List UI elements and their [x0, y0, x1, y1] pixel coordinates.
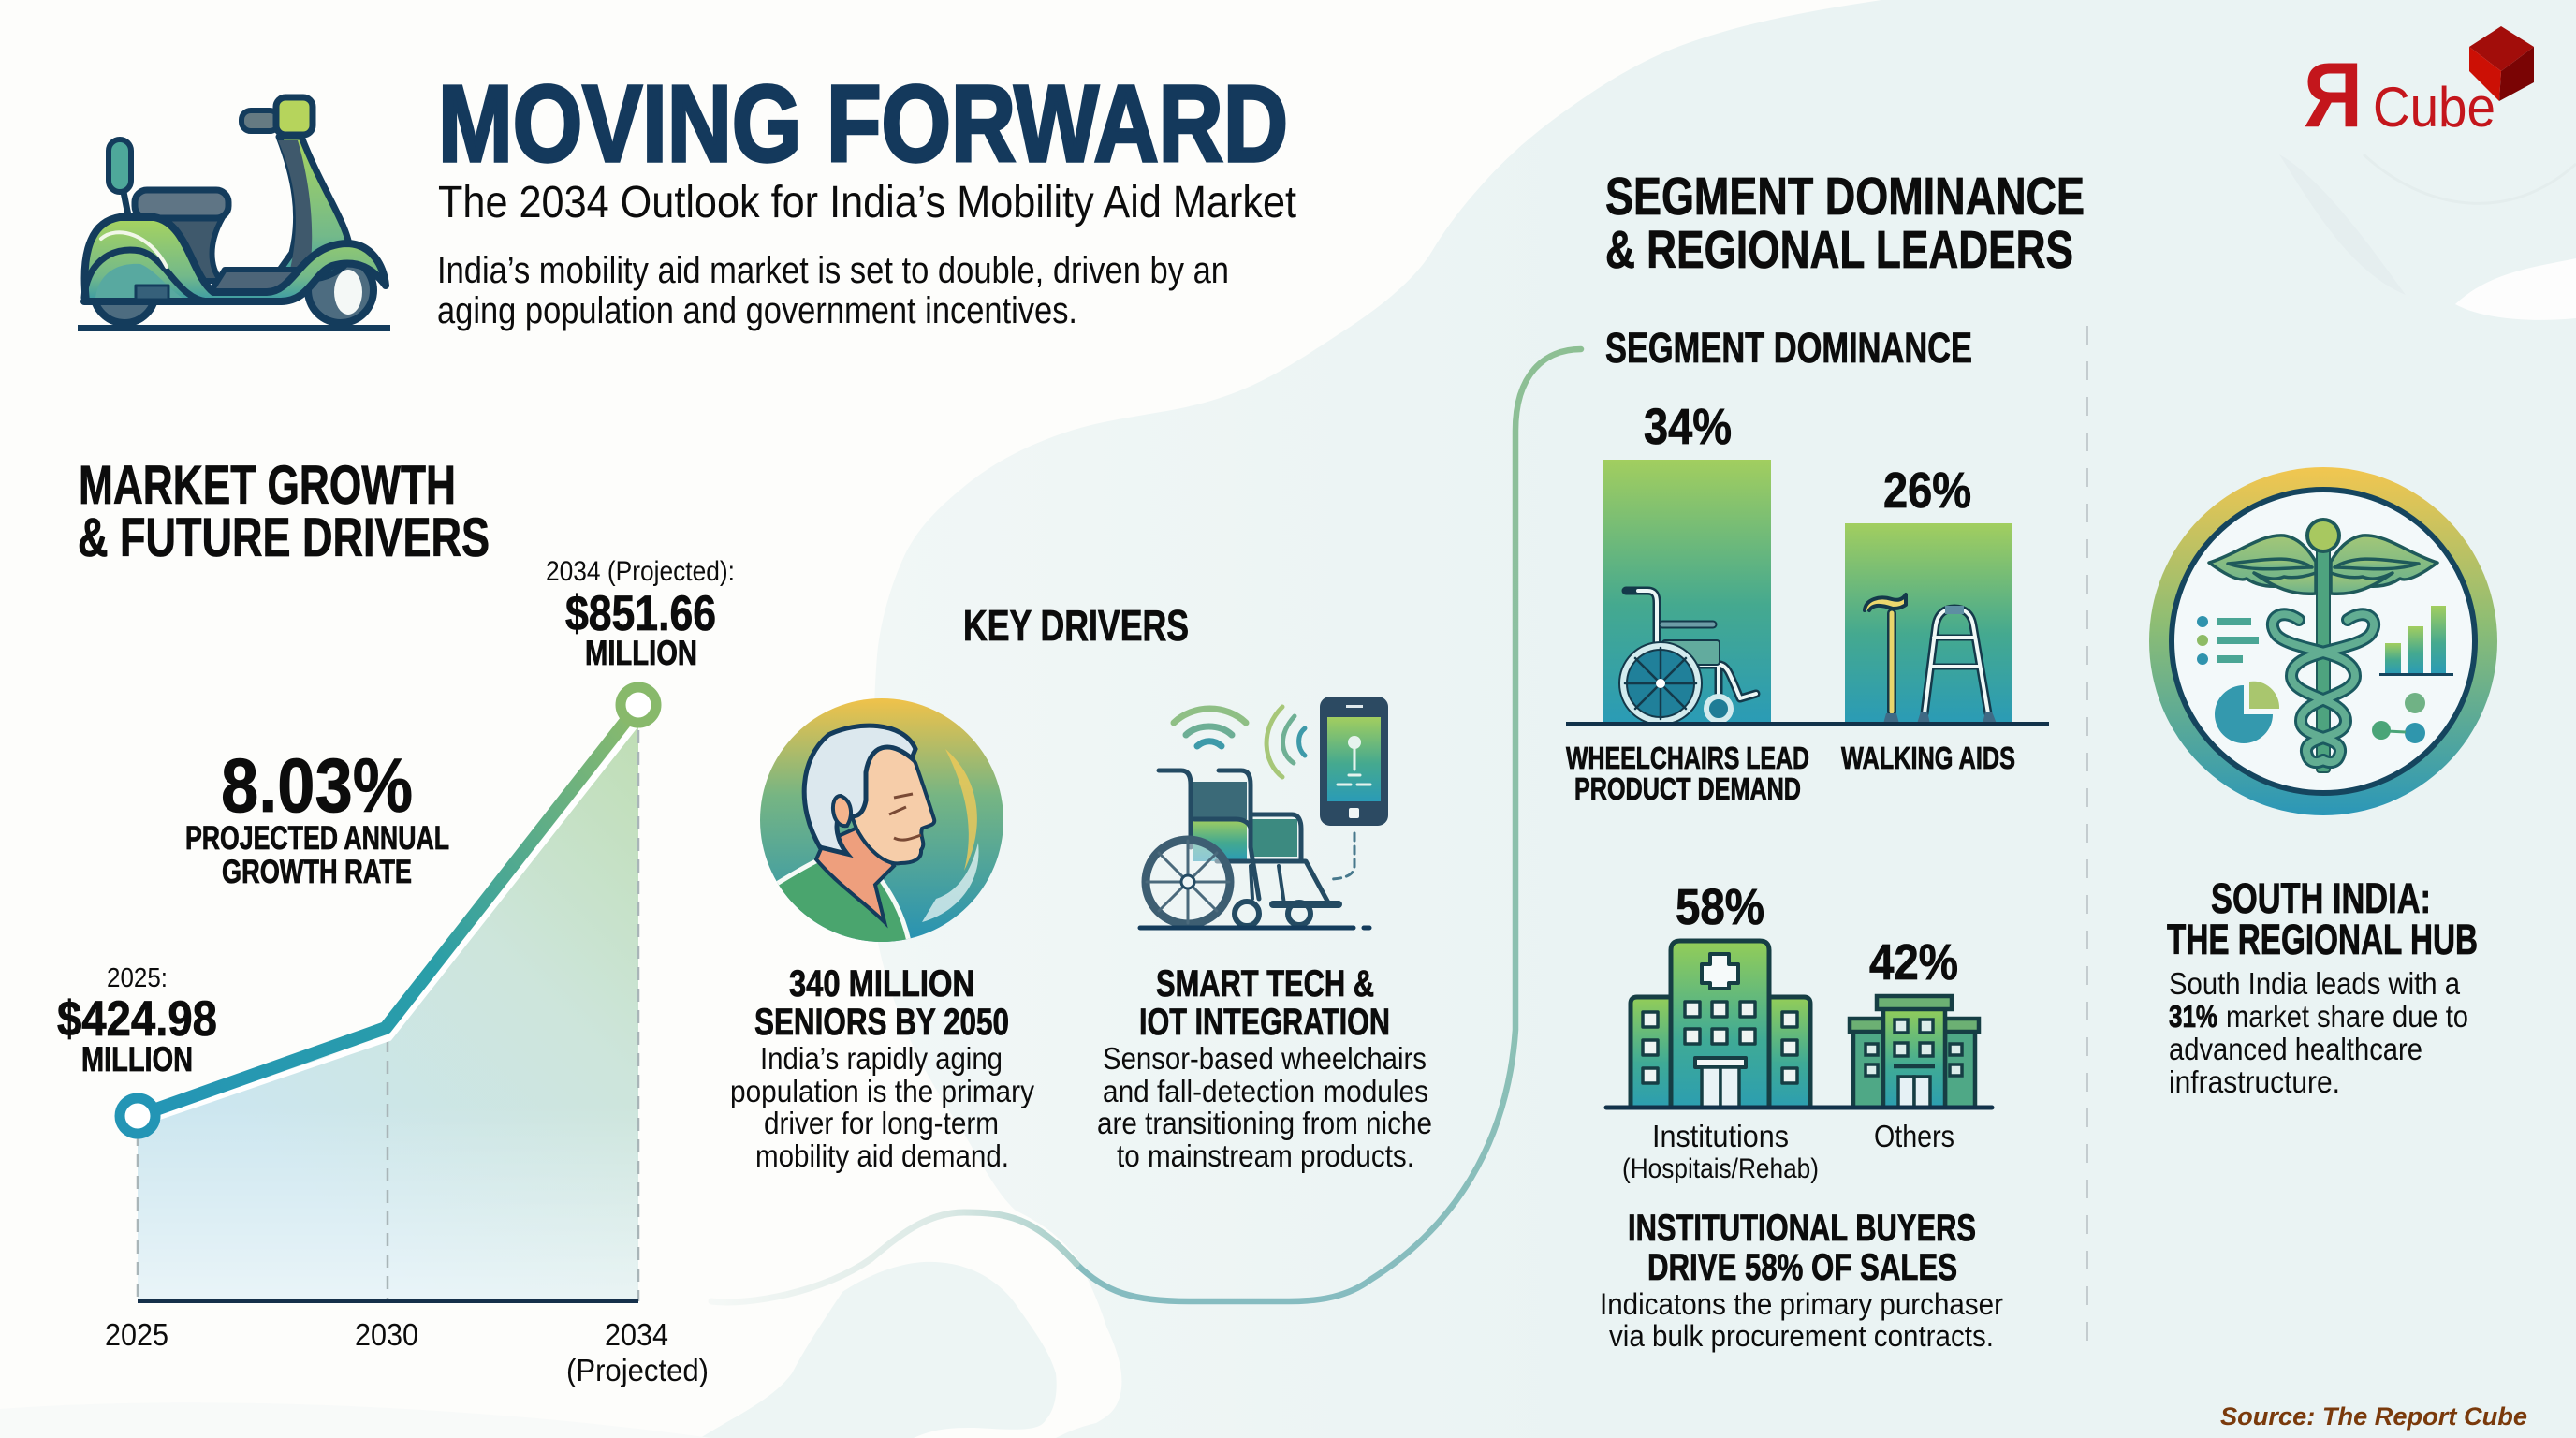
label: 2025 value [57, 963, 217, 1078]
title: MOVING FORWARD [438, 63, 1288, 184]
building labels: Others [1874, 1119, 1954, 1153]
bar glyph [2379, 606, 2453, 676]
chart: market growth [57, 556, 735, 1387]
callout: growth rate: PROJECTED ANNUAL [185, 820, 449, 857]
driver text: smart tech: Sensor-based wheelchairs [1103, 1041, 1427, 1076]
subheading: segment dominance: SEGMENT DOMINANCE [1605, 324, 1972, 372]
label: 2034 value: 2034 (Projected): [546, 556, 735, 587]
driver text: seniors: 340 MILLION [789, 963, 974, 1005]
intro text: aging population and government incentives. [437, 290, 1077, 331]
driver text: seniors [730, 963, 1034, 1173]
icon: phone [1320, 697, 1388, 826]
bar: walking aids 26% [1845, 462, 2012, 724]
axis labels [105, 1317, 709, 1387]
icon: hospital 58% [1631, 879, 1810, 1108]
bar labels: WHEELCHAIRS LEAD [1566, 741, 1809, 775]
driver text: seniors: mobility aid demand. [755, 1138, 1009, 1173]
heading: segment dominance and regional leaders: & REGIONAL LEADERS [1605, 220, 2073, 280]
bar labels: PRODUCT DEMAND [1574, 771, 1801, 806]
chart: buyers by building [1606, 879, 1992, 1184]
text: south india: THE REGIONAL HUB [2167, 916, 2478, 963]
heading: market growth: & FUTURE DRIVERS [78, 507, 490, 568]
driver text: smart tech: SMART TECH & [1156, 963, 1374, 1005]
text: south india: infrastructure. [2169, 1064, 2340, 1099]
label: 2025 value: MILLION [81, 1040, 193, 1078]
logo: RCube: Я [2304, 43, 2363, 146]
driver text: seniors: population is the primary [730, 1074, 1034, 1108]
text: south india: 31% [2169, 999, 2217, 1034]
icon: senior portrait [760, 698, 1003, 946]
snakes [2273, 614, 2374, 762]
text: south india: South India leads with a [2169, 966, 2461, 1001]
network glyph [2372, 693, 2425, 743]
axis labels: 2034 [605, 1317, 668, 1352]
label: 2034 value: MILLION [585, 634, 697, 672]
driver text: smart tech [1097, 963, 1432, 1173]
bar labels [1566, 741, 2015, 806]
icon: caduceus medallion [2149, 467, 2497, 815]
text: south india [2167, 874, 2478, 1099]
axis labels: (Projected) [566, 1353, 709, 1387]
text: institutional buyers: INSTITUTIONAL BUYERS [1628, 1208, 1976, 1249]
driver text: smart tech: to mainstream products. [1117, 1138, 1414, 1173]
logo: RCube: Cube [2373, 76, 2496, 139]
heading: segment dominance and regional leaders: SEGMENT DOMINANCE [1605, 167, 2085, 227]
bar chart: product segments [1566, 399, 2049, 806]
heading: segment dominance and regional leaders [1605, 167, 2085, 280]
axis labels: 2025 [105, 1317, 168, 1352]
pie glyph [2215, 682, 2279, 743]
label: 2025 value: 2025: [107, 963, 168, 993]
subtitle: The 2034 Outlook for India’s Mobility Aid Market [438, 178, 1296, 227]
icon: wifi signals [1174, 707, 1305, 777]
icon: mobility scooter [78, 97, 390, 331]
icon: smart wheelchair with phone [1140, 697, 1388, 928]
icon: other building 42% [1850, 934, 1979, 1108]
callout: growth rate: 8.03% [221, 743, 413, 829]
driver text: seniors: driver for long-term [764, 1106, 999, 1140]
driver text: smart tech: and fall-detection modules [1103, 1074, 1428, 1108]
callout: growth rate [185, 743, 449, 890]
intro text: India’s mobility aid market is set to double, driven by an [437, 250, 1229, 291]
icon: hospital 58%: 58% [1676, 879, 1764, 935]
label: 2025 value: $424.98 [57, 991, 217, 1047]
text: institutional buyers [1600, 1208, 2003, 1353]
driver text: smart tech: are transitioning from niche [1097, 1106, 1432, 1140]
connector curve [711, 349, 1581, 1302]
text: institutional buyers: Indicatons the primary purchaser [1600, 1287, 2003, 1321]
building labels: (Hospitais/Rehab) [1622, 1153, 1819, 1184]
label: 2034 value: $851.66 [565, 586, 716, 641]
heading: market growth: MARKET GROWTH [79, 455, 456, 516]
axis labels: 2030 [355, 1317, 418, 1352]
bar: wheelchairs 34%: 34% [1644, 399, 1732, 455]
wings [2209, 536, 2437, 594]
heading: market growth [78, 455, 490, 568]
text: south india: advanced healthcare [2169, 1032, 2422, 1066]
text: south india: SOUTH INDIA: [2211, 874, 2431, 922]
icon: other building 42%: 42% [1869, 934, 1958, 990]
bar: wheelchairs 34% [1603, 399, 1771, 724]
heading: key drivers: KEY DRIVERS [963, 601, 1189, 650]
bar labels: WALKING AIDS [1841, 741, 2015, 775]
bar: walking aids 26%: 26% [1883, 462, 1971, 519]
driver text: smart tech: IOT INTEGRATION [1139, 1002, 1390, 1043]
building labels: Institutions [1652, 1119, 1789, 1153]
text: institutional buyers: via bulk procurement contracts. [1609, 1319, 1994, 1353]
building labels [1622, 1119, 1954, 1184]
label: 2034 value [546, 556, 735, 672]
text: south india: market share due to [2226, 999, 2468, 1034]
driver text: seniors: SENIORS BY 2050 [754, 1002, 1009, 1043]
source note: Source: The Report Cube [2220, 1402, 2527, 1431]
driver text: seniors: India’s rapidly aging [760, 1041, 1003, 1076]
list glyph [2197, 616, 2259, 665]
intro text [437, 250, 1229, 331]
logo: RCube [2304, 26, 2534, 146]
staff [2317, 548, 2330, 772]
callout: growth rate: GROWTH RATE [222, 854, 412, 890]
text: institutional buyers: DRIVE 58% OF SALES [1647, 1247, 1957, 1288]
